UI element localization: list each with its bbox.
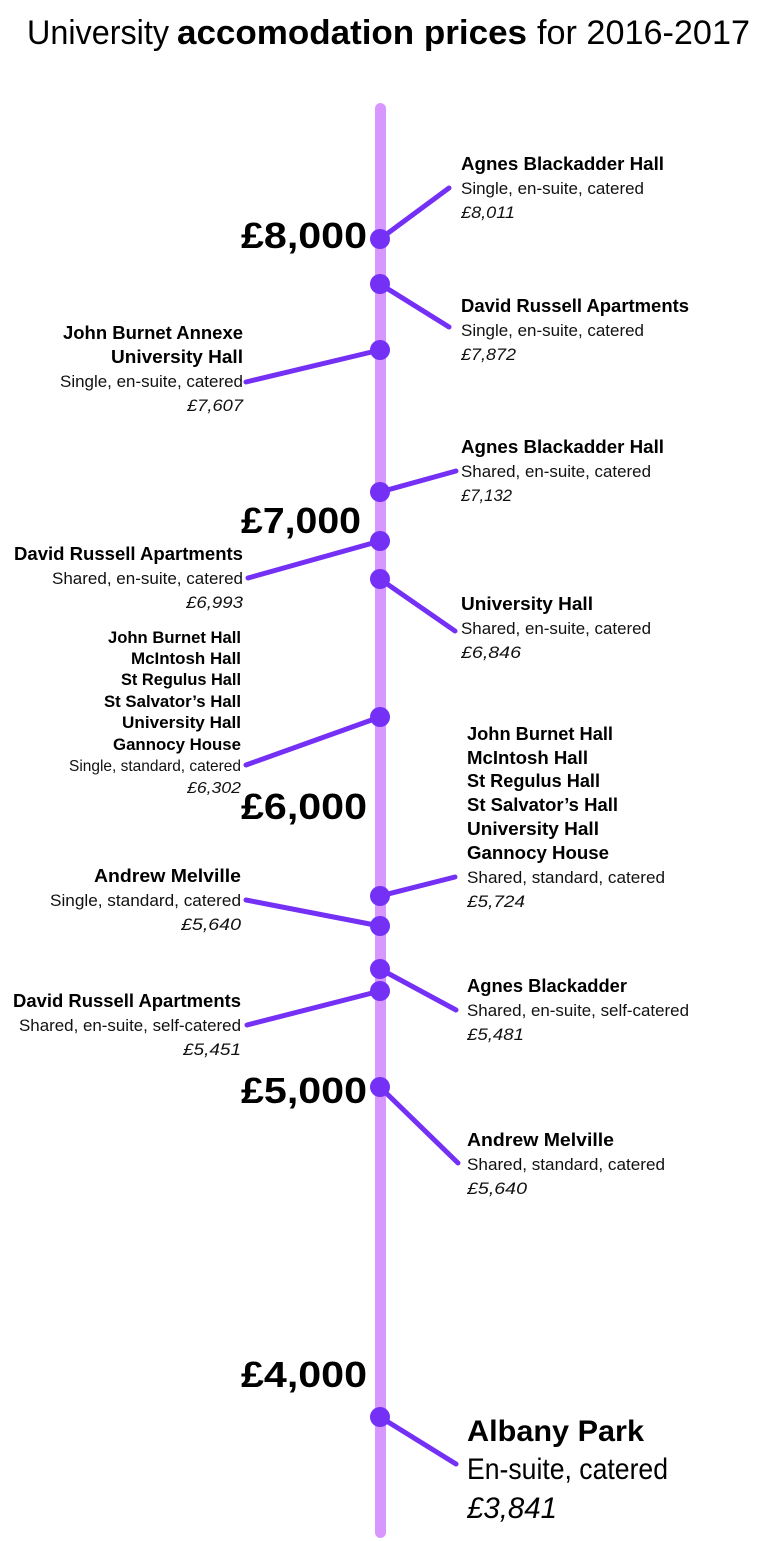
entry: single standard catered halls: St Salvator’s Hall [104,692,241,711]
entry: single standard catered halls: John Burnet Hall [108,628,241,647]
entry: David Russell Apartments self-catered: David Russell Apartments [13,991,241,1011]
entry: John Burnet Annexe, University Hall [60,323,390,415]
entry: David Russell Apartments shared: £6,993 [185,593,244,612]
entry: Andrew Melville single: Andrew Melville [94,866,241,886]
entry: Agnes Blackadder Hall shared: Agnes Blackadder Hall [461,437,664,457]
entry: shared standard catered halls: Shared, standard, catered [467,868,665,887]
entry: shared standard catered halls: St Salvator’s Hall [467,795,618,815]
entry: University Hall shared [370,569,651,662]
title: accomodation prices [177,14,527,52]
entry: single standard catered halls: University Hall [122,713,241,732]
entry: single standard catered halls: St Regulus Hall [121,670,241,689]
entry: Albany Park: En-suite, catered [467,1453,668,1486]
entry: Andrew Melville shared: £5,640 [466,1179,528,1198]
timeline axis [375,103,386,1538]
entry: University Hall shared: £6,846 [460,643,522,662]
scale labels: £8,000 [241,215,367,256]
scale labels: £7,000 [241,500,361,541]
entry: shared standard catered halls: McIntosh Hall [467,748,588,768]
entry: Albany Park: £3,841 [466,1492,557,1525]
entry: David Russell Apartments single: Single, en-suite, catered [461,321,644,340]
entry: Agnes Blackadder self-catered: Agnes Blackadder [467,976,627,996]
entry: David Russell Apartments self-catered [13,981,390,1059]
entry: David Russell Apartments single [370,274,689,364]
entry: University Hall shared: University Hall [461,594,593,614]
entry: David Russell Apartments self-catered: £5,451 [182,1040,241,1059]
scale labels: £5,000 [241,1070,367,1111]
title [27,14,750,52]
title: University [27,14,169,52]
entry: Agnes Blackadder Hall shared: Shared, en-suite, catered [461,462,651,481]
entry: John Burnet Annexe, University Hall: Single, en-suite, catered [60,372,243,391]
entry: John Burnet Annexe, University Hall: John Burnet Annexe [63,323,243,343]
entry: David Russell Apartments self-catered: Shared, en-suite, self-catered [19,1016,241,1035]
entry: Agnes Blackadder Hall shared [370,437,664,505]
entry: Agnes Blackadder Hall single: Single, en-suite, catered [461,179,644,198]
entry: Albany Park: Albany Park [467,1415,644,1448]
entry: Andrew Melville shared [370,1077,665,1198]
entry: Andrew Melville single: Single, standard, catered [50,891,241,910]
entry: single standard catered halls: McIntosh Hall [131,649,241,668]
entry: John Burnet Annexe, University Hall: £7,607 [186,396,244,415]
entry: shared standard catered halls: Gannocy House [467,843,609,863]
scale labels: £6,000 [241,786,367,827]
entry: single standard catered halls: £6,302 [186,780,241,797]
scale labels: £4,000 [241,1354,367,1395]
scale labels [241,215,367,1395]
entry: Andrew Melville shared: Shared, standard, catered [467,1155,665,1174]
entry: John Burnet Annexe, University Hall: University Hall [111,347,243,367]
entry: David Russell Apartments shared: Shared, en-suite, catered [52,569,243,588]
entry: Agnes Blackadder self-catered: £5,481 [466,1025,524,1044]
entry: Agnes Blackadder Hall single: £8,011 [460,203,515,222]
entry: shared standard catered halls: University Hall [467,819,599,839]
entry: shared standard catered halls: John Burnet Hall [467,724,613,744]
entry: David Russell Apartments shared [14,531,390,612]
entry: David Russell Apartments shared: David Russell Apartments [14,544,243,564]
entry: single standard catered halls: Gannocy House [113,735,241,754]
entry: Andrew Melville single: £5,640 [180,915,242,934]
entry: Andrew Melville shared: Andrew Melville [467,1130,614,1150]
entry: shared standard catered halls: £5,724 [466,892,525,911]
title: for 2016-2017 [537,14,750,52]
entry: Agnes Blackadder Hall shared: £7,132 [460,486,513,505]
entry: shared standard catered halls: St Regulus Hall [467,771,600,791]
entry: Agnes Blackadder self-catered [370,959,689,1044]
entry: University Hall shared: Shared, en-suite, catered [461,619,651,638]
entry: David Russell Apartments single: £7,872 [460,345,517,364]
entry: Agnes Blackadder Hall single [370,154,664,249]
entry: David Russell Apartments single: David Russell Apartments [461,296,689,316]
entry: single standard catered halls: Single, standard, catered [69,758,241,775]
entry: Albany Park [370,1407,668,1525]
entry: Andrew Melville single [50,866,390,936]
entry: shared standard catered halls [370,724,665,911]
entry: Agnes Blackadder self-catered: Shared, en-suite, self-catered [467,1001,689,1020]
entry: single standard catered halls [69,628,390,797]
entry: Agnes Blackadder Hall single: Agnes Blackadder Hall [461,154,664,174]
